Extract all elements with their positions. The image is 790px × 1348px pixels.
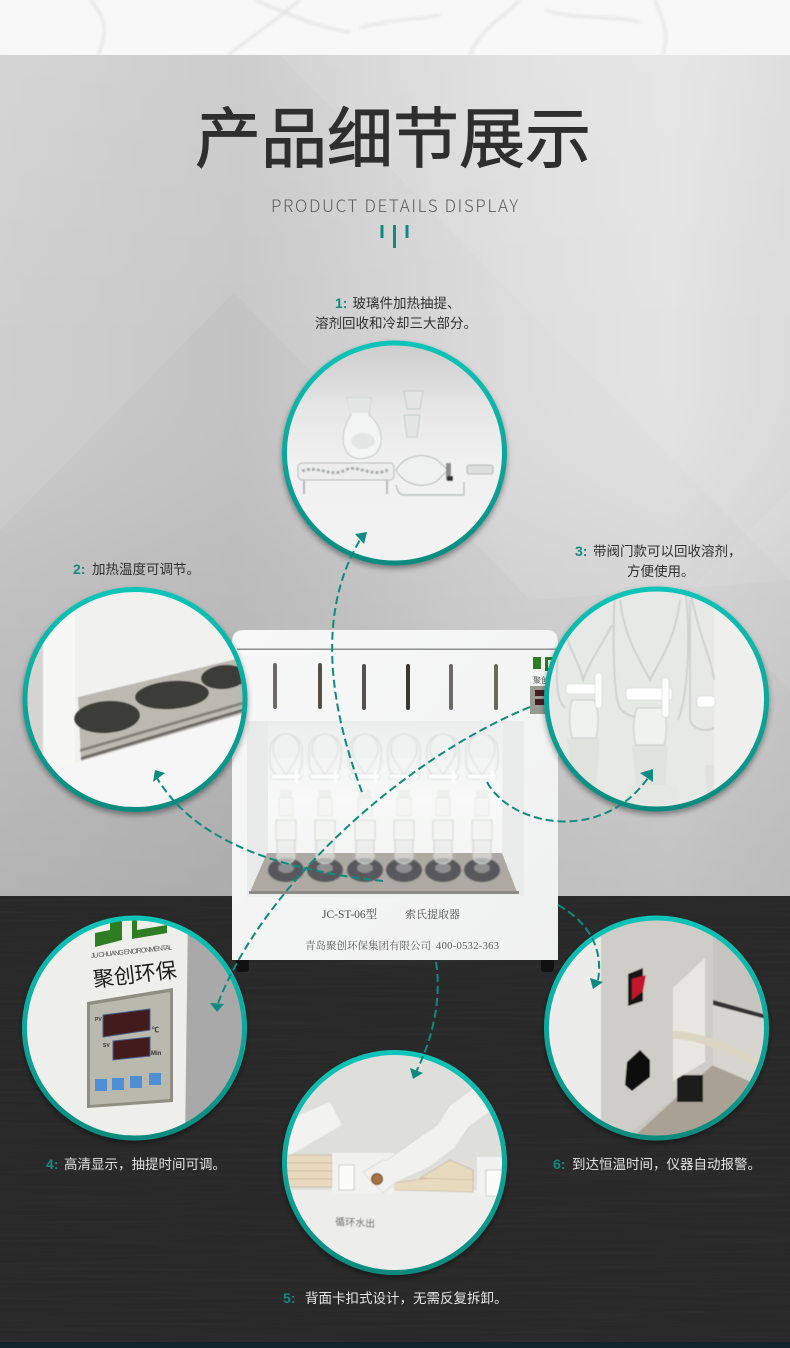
caption 5: 背面卡扣式设计，无需反复拆卸。	[305, 1290, 508, 1306]
green logo	[95, 920, 167, 947]
arrow to circle 2	[153, 770, 383, 881]
heating holes	[73, 699, 141, 735]
detail circle 4: display panel	[22, 916, 248, 1142]
screw	[372, 1174, 382, 1184]
instrument feet	[236, 958, 554, 972]
instrument: soxhlet extractor: 聚创	[533, 675, 549, 685]
instrument: soxhlet extractor: 索氏提取器	[405, 907, 460, 921]
arrow to circle 5	[410, 962, 438, 1079]
caption 3: 方便使用。	[627, 563, 694, 579]
caption 1: 1:	[335, 295, 347, 311]
caption 2: 加热温度可调节。	[92, 562, 200, 577]
detail circle 5: rear clip	[282, 1050, 509, 1276]
controller	[87, 988, 173, 1108]
caption 2: 2:	[73, 561, 85, 577]
detail circle 1: glassware	[280, 340, 510, 566]
detail circle 4: display panel: JU CHUANG ENCIRONMENTAL	[90, 944, 173, 960]
caption 6: 到达恒温时间，仪器自动报警。	[572, 1157, 761, 1172]
logo on instrument	[533, 657, 553, 671]
glass extraction units	[268, 734, 500, 882]
detail circle 4: display panel: SV	[103, 1043, 110, 1049]
arrow to circle 6	[558, 905, 603, 989]
caption 6: 6:	[553, 1156, 565, 1172]
title accent bars	[380, 225, 408, 248]
caption 3: 带阀门款可以回收溶剂，	[593, 544, 742, 559]
arrow to circle 3	[487, 769, 653, 821]
rocker switch	[628, 968, 643, 1006]
wire bundle	[285, 1155, 473, 1192]
steel tray	[78, 657, 245, 761]
instrument body	[232, 630, 558, 960]
ring 6	[546, 918, 766, 1138]
control panel	[530, 686, 546, 714]
ring 5	[284, 1052, 504, 1272]
ring 1	[284, 343, 504, 563]
dark textured floor	[0, 896, 790, 1348]
caption 1: 玻璃件加热抽提、	[352, 295, 460, 311]
instrument: soxhlet extractor: 青岛聚创环保集团有限公司	[305, 939, 431, 952]
caption 5: 5:	[283, 1290, 295, 1306]
plastic clip block	[332, 1153, 394, 1193]
instrument: soxhlet extractor: 400-0532-363	[436, 941, 499, 952]
adapter column	[404, 391, 423, 437]
caption 4: 4:	[46, 1156, 58, 1172]
glass window	[247, 721, 524, 897]
curved strap	[363, 1088, 490, 1193]
stopcocks	[566, 673, 715, 717]
grey faceted background	[0, 55, 790, 897]
detail circle 4: display panel: ℃	[152, 1026, 159, 1034]
title: 产品细节展示	[195, 102, 591, 176]
ring 2	[25, 590, 245, 810]
metal tray	[250, 853, 517, 892]
ring 4	[24, 918, 244, 1138]
detail circle 6: power switch	[544, 916, 770, 1142]
detail circle 4: display panel: PV	[95, 1017, 102, 1023]
foot	[677, 1075, 703, 1102]
power socket	[625, 1050, 650, 1091]
white side	[549, 936, 602, 1120]
keypad	[95, 1073, 161, 1091]
grey side panel	[601, 916, 713, 1134]
caption 3: 3:	[575, 543, 587, 559]
arrow to circle 1	[332, 532, 367, 792]
subtitle: PRODUCT DETAILS DISPLAY	[271, 192, 518, 217]
detail circle 4: display panel: 聚创环保	[92, 959, 178, 992]
joints	[568, 738, 714, 793]
glass bodies	[557, 590, 714, 730]
round flask	[343, 398, 381, 459]
tube window	[673, 958, 705, 1081]
detail circle 2: heating plate	[23, 587, 248, 813]
instrument: soxhlet extractor: JC-ST-06型	[322, 907, 377, 921]
instrument: soxhlet extractor	[232, 630, 558, 972]
ring 3	[546, 589, 766, 809]
slots	[273, 663, 498, 710]
marble top band	[0, 0, 790, 55]
detail circle 5: rear clip: 循环水出	[335, 1215, 375, 1230]
condenser tube	[298, 456, 493, 495]
caption 1: 溶剂回收和冷却三大部分。	[315, 316, 477, 331]
arrow to circle 4	[210, 707, 530, 1012]
caption 4: 高清显示，抽提时间可调。	[64, 1156, 226, 1172]
left strap	[285, 1102, 342, 1158]
detail circle 4: display panel: Min	[151, 1051, 162, 1057]
detail circle 3: valve	[544, 587, 770, 815]
